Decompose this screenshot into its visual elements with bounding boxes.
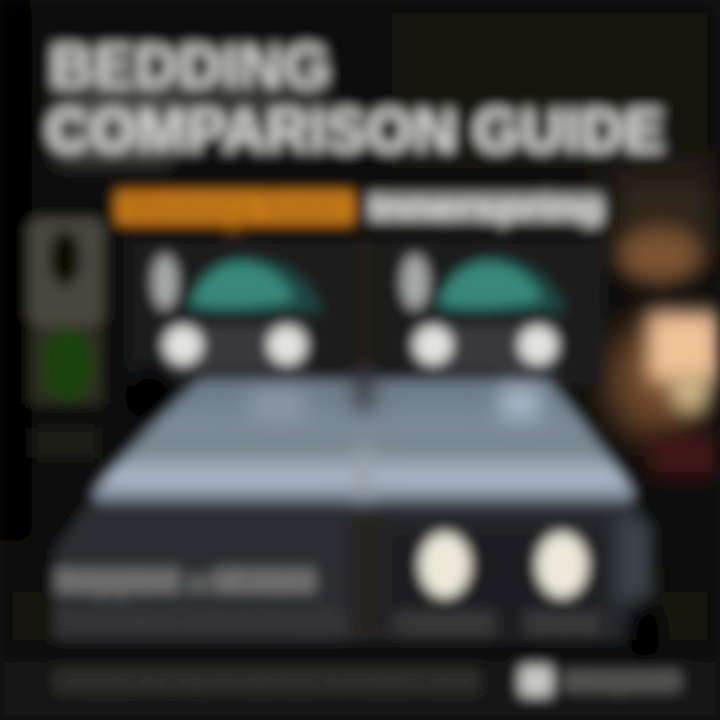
left small icon — [153, 255, 177, 309]
lamp glow — [605, 312, 720, 440]
rating captions: Comfort — [392, 609, 497, 636]
dark gaps around circles — [385, 525, 605, 640]
orange label: Memory foam — [126, 190, 342, 223]
left dot two — [268, 326, 306, 364]
title — [46, 33, 664, 164]
dark band — [0, 640, 720, 662]
bottom left caption — [55, 563, 345, 636]
rating captions — [392, 609, 602, 636]
right dot one — [414, 326, 452, 364]
plant — [30, 326, 102, 458]
footer logo: Sleepwell — [562, 666, 680, 696]
rating captions: Value — [522, 609, 602, 636]
bottom left caption: Pressure relief details — [55, 606, 345, 636]
rating circle two — [537, 533, 587, 597]
wall frame — [28, 218, 104, 326]
left bar — [170, 325, 305, 373]
right bar — [420, 325, 555, 373]
right teal arc — [436, 258, 566, 312]
bottom left caption: Support and care — [55, 563, 317, 599]
shadow right of bed — [627, 602, 663, 662]
center gap — [356, 238, 376, 386]
footer band — [0, 662, 720, 720]
right headboard — [380, 240, 604, 386]
orange label — [116, 190, 354, 232]
right small icon — [402, 255, 428, 309]
rating circle one — [420, 533, 470, 597]
left teal arc — [188, 258, 322, 312]
right dot two — [519, 326, 557, 364]
title: BEDDING — [50, 33, 330, 100]
white label: Innerspring — [368, 189, 604, 227]
title: COMPARISON GUIDE — [46, 97, 664, 164]
left headboard — [128, 240, 352, 386]
footer text: Choose the right mattress for better sleep — [52, 667, 480, 694]
red bedside furniture — [650, 435, 720, 477]
bed base — [55, 495, 650, 640]
duvet — [94, 366, 633, 505]
left dot one — [164, 326, 202, 364]
shadow left of bed — [126, 370, 174, 420]
